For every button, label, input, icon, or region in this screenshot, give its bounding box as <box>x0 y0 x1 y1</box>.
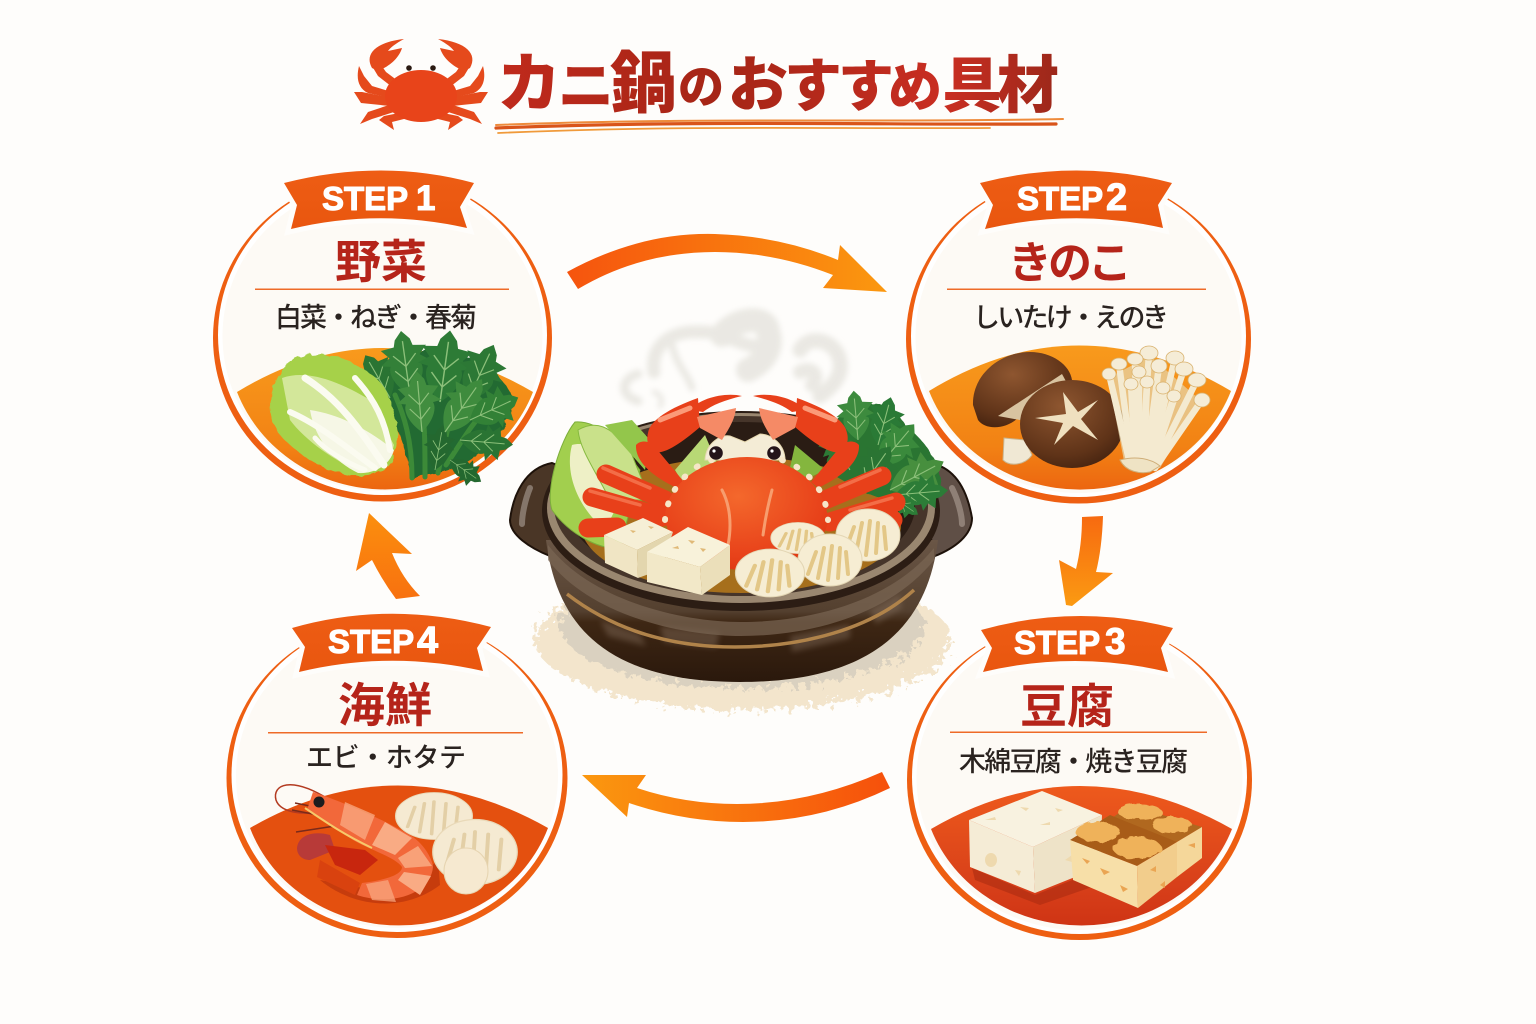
step 3 ribbon <box>981 616 1173 672</box>
circle frame <box>907 620 1252 940</box>
herbs in pot <box>811 389 953 524</box>
icon: crab <box>354 39 488 130</box>
title text: 鍋 <box>610 30 677 127</box>
step 2 ribbon <box>980 170 1172 229</box>
icon: chrysanthemum greens <box>347 327 527 492</box>
red plate segment <box>250 786 548 925</box>
pot body <box>546 540 938 682</box>
panel: step 1 vegetables <box>213 170 552 502</box>
title text: 材 <box>997 35 1059 125</box>
arrow: step 2 to step 3 <box>1059 516 1113 606</box>
step 1 ribbon <box>284 170 474 229</box>
circle frame <box>226 618 568 938</box>
pot handles <box>510 463 972 556</box>
title text: す <box>838 42 894 123</box>
crab claws <box>636 395 859 488</box>
icon: firm tofu block <box>969 791 1112 905</box>
panel: step 2 mushrooms <box>906 170 1251 504</box>
title text: め <box>888 43 942 122</box>
arrow: step 1 to step 2 <box>567 234 887 292</box>
ingredients list: しいたけ・えのき <box>973 296 1169 335</box>
pot rim <box>542 411 940 611</box>
step 2 label: STEP <box>1017 180 1103 217</box>
icon: scallops <box>396 793 517 894</box>
tofu in pot <box>604 518 730 595</box>
heading: 豆腐 <box>1020 668 1114 737</box>
heading: きのこ <box>1008 227 1132 291</box>
sand-coloured ground stain <box>535 564 951 710</box>
step 4 label: 4 <box>417 620 438 662</box>
crab face fringe and eyes backing <box>705 434 785 460</box>
title text: す <box>784 39 842 123</box>
heading: 野菜 <box>335 226 427 292</box>
pot body mottling <box>600 594 902 652</box>
napa in pot <box>550 420 825 548</box>
title text: カ <box>497 33 561 125</box>
red plate segment <box>931 786 1232 925</box>
divider <box>268 732 523 734</box>
icon: enoki mushrooms <box>1102 346 1210 473</box>
ingredients list: エビ・ホタテ <box>306 736 466 775</box>
title text: ニ <box>558 42 614 123</box>
ingredients list: 木綿豆腐・焼き豆腐 <box>959 740 1188 779</box>
arrow: step 4 to step 1 <box>356 513 420 599</box>
step 4 ribbon <box>292 614 491 672</box>
orange plate segment <box>929 346 1231 490</box>
step 3 label: STEP <box>1014 624 1100 661</box>
steam <box>624 320 840 406</box>
step 3 label: 3 <box>1105 621 1126 662</box>
circle frame <box>906 174 1251 504</box>
title underline <box>496 119 1063 133</box>
circle frame <box>213 174 552 502</box>
crab eyes <box>709 446 781 460</box>
divider <box>950 732 1207 733</box>
title text: の <box>678 51 724 117</box>
divider <box>947 288 1206 290</box>
broth <box>581 457 901 593</box>
pot front lip shading <box>548 545 934 636</box>
heading: 海鮮 <box>338 667 432 736</box>
ingredients list: 白菜・ねぎ・春菊 <box>275 296 477 335</box>
arrow: step 3 to step 4 <box>582 772 890 822</box>
icon: shiitake mushrooms <box>973 352 1124 468</box>
step 1 label: STEP <box>322 180 408 217</box>
crab legs <box>588 474 896 530</box>
orange plate segment <box>237 348 533 489</box>
panel: step 3 tofu <box>907 616 1252 940</box>
central illustration: crab hot pot <box>510 320 972 710</box>
divider <box>255 288 509 290</box>
icon: grilled tofu blocks <box>1070 804 1202 908</box>
step 1 label: 1 <box>416 179 435 218</box>
icon: shrimp <box>275 785 440 904</box>
pot gold band <box>567 590 914 647</box>
step 2 label: 2 <box>1106 177 1127 219</box>
icon: napa cabbage <box>271 355 398 476</box>
title text: お <box>728 37 788 124</box>
panel: step 4 seafood <box>226 614 568 938</box>
scallops in pot <box>735 509 900 597</box>
crab shell <box>665 457 828 570</box>
title group <box>354 30 1063 133</box>
step 4 label: STEP <box>328 623 414 660</box>
title text: 具 <box>942 38 1002 125</box>
